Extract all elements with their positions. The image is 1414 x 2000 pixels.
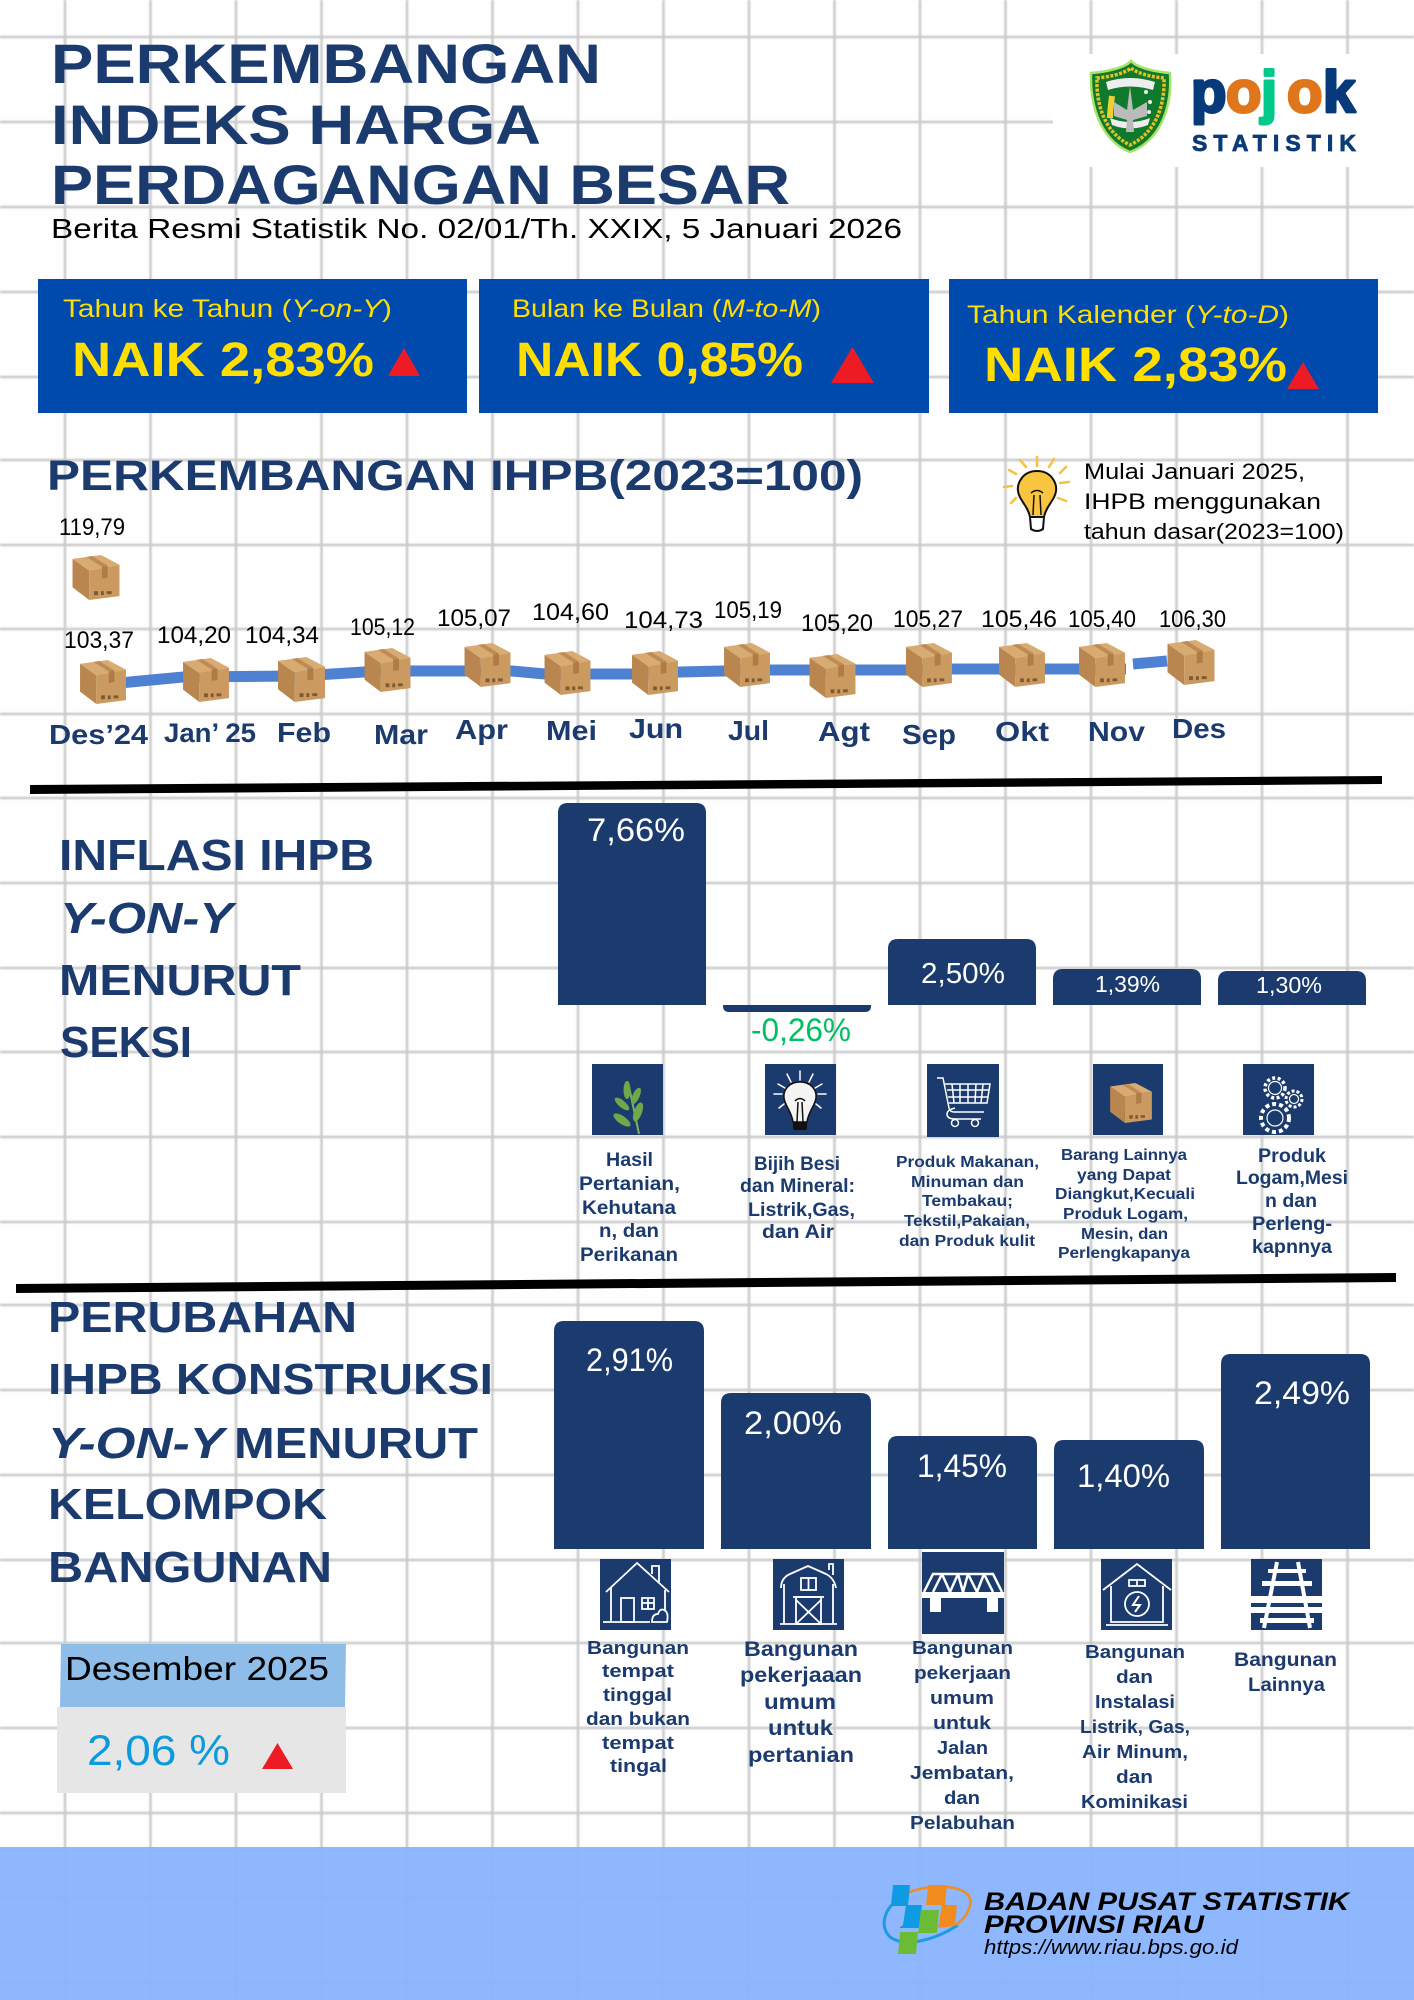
heading: konstruksi: BANGUNAN bbox=[48, 1543, 332, 1592]
label: Bijih Besi: dan Air bbox=[762, 1222, 835, 1243]
label: Produk Makanan: Minuman dan bbox=[911, 1174, 1024, 1191]
label: Barang Lainnya: Diangkut,Kecuali bbox=[1055, 1186, 1195, 1203]
icon: up triangle bbox=[388, 348, 420, 376]
point Des'24: 103,37 bbox=[64, 627, 134, 654]
point Jun bbox=[624, 607, 703, 744]
point Agt: 105,20 bbox=[801, 610, 873, 637]
label: jalan jembatan: Bangunan bbox=[912, 1638, 1013, 1658]
label: Barang Lainnya: Produk Logam, bbox=[1063, 1206, 1188, 1223]
label: Barang Lainnya: Mesin, dan bbox=[1081, 1226, 1168, 1243]
label: instalasi: Kominikasi bbox=[1081, 1792, 1188, 1812]
label: lainnya: Lainnya bbox=[1248, 1675, 1325, 1696]
label: Produk Logam: Perleng- bbox=[1252, 1214, 1332, 1235]
point Mei: Mei bbox=[546, 715, 597, 746]
label: Bijih Besi: Bijih Besi bbox=[754, 1154, 840, 1175]
label: instalasi: dan bbox=[1116, 1767, 1153, 1787]
heading: inflasi seksi: SEKSI bbox=[60, 1018, 192, 1067]
note: base year: IHPB menggunakan bbox=[1084, 489, 1321, 514]
bar Barang Lainnya bbox=[1053, 969, 1201, 1005]
bar Bijih Besi bbox=[723, 1005, 871, 1048]
bar Hasil Pertanian bbox=[558, 803, 706, 1005]
heading: inflasi seksi: Y-ON-Y bbox=[60, 894, 237, 943]
title: PERKEMBANGAN bbox=[51, 32, 601, 95]
label: tempat tinggal: Bangunan bbox=[587, 1638, 689, 1658]
footer bbox=[0, 1847, 1414, 2000]
point Jan 25 bbox=[157, 622, 256, 748]
point Feb: 104,34 bbox=[245, 622, 319, 649]
label: Produk Makanan bbox=[896, 1154, 1039, 1250]
label: jalan jembatan bbox=[910, 1638, 1015, 1833]
bar Hasil Pertanian: 7,66% bbox=[587, 812, 685, 848]
point Jan 25: Jan’ 25 bbox=[164, 718, 256, 748]
icon: power house bbox=[1101, 1559, 1172, 1630]
label: lainnya: Bangunan bbox=[1234, 1650, 1337, 1671]
label: Produk Logam: Logam,Mesi bbox=[1236, 1168, 1348, 1189]
label: Barang Lainnya: Barang Lainnya bbox=[1061, 1147, 1187, 1164]
bar instalasi bbox=[1054, 1440, 1204, 1549]
note: base year: tahun dasar(2023=100) bbox=[1084, 519, 1344, 544]
title: INDEKS HARGA bbox=[51, 93, 541, 156]
point Mei: 104,60 bbox=[532, 599, 609, 626]
icon: barn bbox=[773, 1559, 844, 1630]
point Okt bbox=[981, 606, 1057, 747]
label: Hasil Pertanian: Kehutana bbox=[582, 1198, 676, 1219]
label: jalan jembatan: umum bbox=[930, 1688, 994, 1708]
label: jalan jembatan: pekerjaan bbox=[914, 1663, 1011, 1683]
bar pertanian bbox=[721, 1393, 871, 1549]
point Mei bbox=[532, 599, 609, 746]
icon: house bbox=[600, 1559, 671, 1630]
heading: konstruksi: MENURUT bbox=[234, 1419, 478, 1468]
bar tempat tinggal: 2,91% bbox=[586, 1342, 673, 1378]
point Des bbox=[1159, 606, 1226, 744]
panel: M-to-M bbox=[479, 279, 929, 413]
icon: up triangle bbox=[1287, 362, 1319, 389]
point Nov bbox=[1068, 606, 1145, 747]
bar instalasi: 1,40% bbox=[1077, 1458, 1170, 1494]
icon: bridge bbox=[922, 1552, 1004, 1634]
label: Produk Makanan: Tekstil,Pakaian, bbox=[904, 1213, 1030, 1230]
label: Hasil Pertanian: Hasil bbox=[606, 1150, 653, 1171]
label: instalasi: Air Minum, bbox=[1082, 1742, 1188, 1762]
point Sep: Sep bbox=[902, 719, 956, 750]
panel: M-to-M: NAIK 0,85% bbox=[516, 334, 803, 387]
bar jalan jembatan: 1,45% bbox=[917, 1448, 1007, 1484]
label: Produk Makanan: dan Produk kulit bbox=[899, 1233, 1036, 1250]
label: tempat tinggal bbox=[586, 1638, 690, 1776]
note: base year bbox=[1084, 459, 1344, 544]
label: Produk Logam: n dan bbox=[1265, 1191, 1317, 1212]
trend line bbox=[120, 661, 1167, 683]
bar jalan jembatan bbox=[888, 1436, 1037, 1549]
point Des'24 bbox=[49, 627, 148, 750]
label: pekerjaan pertanian: Bangunan bbox=[744, 1638, 858, 1661]
line chart: IHPB bbox=[49, 514, 1226, 750]
bar tempat tinggal bbox=[554, 1321, 704, 1549]
icon: gears bbox=[1243, 1064, 1314, 1135]
bar chart: konstruksi bbox=[554, 1321, 1370, 1549]
label: Bijih Besi: Listrik,Gas, bbox=[748, 1200, 855, 1221]
icon: bulb bbox=[765, 1064, 836, 1135]
note: base year: Mulai Januari 2025, bbox=[1084, 459, 1305, 484]
point Okt: 105,46 bbox=[981, 606, 1057, 633]
label: Produk Makanan: Tembakau; bbox=[922, 1193, 1013, 1210]
label: jalan jembatan: dan bbox=[944, 1788, 980, 1808]
label: pekerjaan pertanian: untuk bbox=[768, 1717, 833, 1740]
heading: IHPB trend: PERKEMBANGAN IHPB(2023=100) bbox=[47, 452, 863, 500]
point Jun: 104,73 bbox=[624, 607, 703, 634]
label: instalasi: Instalasi bbox=[1095, 1692, 1175, 1712]
panel: Y-to-D: NAIK 2,83% bbox=[984, 339, 1287, 392]
point Jun: Jun bbox=[629, 713, 683, 744]
label: Bijih Besi bbox=[740, 1154, 855, 1243]
panel: Desember 2025 bbox=[57, 1644, 346, 1793]
icon: rail track bbox=[1251, 1559, 1322, 1630]
panel: M-to-M: Bulan ke Bulan ( M-to-M ) bbox=[512, 295, 821, 323]
heading: konstruksi: KELOMPOK bbox=[48, 1480, 327, 1529]
panel: Y-to-D bbox=[949, 279, 1378, 413]
panel: Y-to-D: Tahun Kalender ( Y-to-D ) bbox=[967, 301, 1289, 329]
heading: konstruksi: PERUBAHAN bbox=[48, 1293, 357, 1342]
point Mar: 105,12 bbox=[350, 614, 415, 641]
bar lainnya: 2,49% bbox=[1254, 1375, 1350, 1411]
icon: provincial emblem bbox=[1091, 61, 1170, 152]
heading: inflasi seksi: INFLASI IHPB bbox=[59, 831, 374, 880]
label: Produk Logam: kapnnya bbox=[1252, 1237, 1332, 1258]
icon: package bbox=[1093, 1064, 1163, 1135]
point Mar bbox=[350, 614, 428, 750]
logo panel bbox=[1053, 54, 1414, 167]
heading: inflasi seksi bbox=[59, 831, 374, 1067]
point Des: Des bbox=[1172, 713, 1226, 744]
label: Hasil Pertanian bbox=[579, 1150, 680, 1266]
label: Barang Lainnya bbox=[1055, 1147, 1195, 1262]
label: pekerjaan pertanian bbox=[740, 1638, 862, 1767]
icon: light bulb bbox=[1004, 457, 1069, 531]
icon: up triangle bbox=[831, 347, 874, 383]
label: Barang Lainnya: Perlengkapanya bbox=[1058, 1245, 1190, 1262]
point Des: 106,30 bbox=[1159, 606, 1226, 633]
label: jalan jembatan: Jalan bbox=[937, 1738, 988, 1758]
point Jul: Jul bbox=[728, 715, 769, 746]
panel: Y-on-Y bbox=[38, 279, 467, 413]
label: Hasil Pertanian: Pertanian, bbox=[579, 1174, 680, 1195]
label: instalasi: dan bbox=[1116, 1667, 1153, 1687]
label: lainnya bbox=[1234, 1650, 1337, 1696]
label: Produk Logam: Produk bbox=[1258, 1146, 1326, 1167]
label: instalasi: Bangunan bbox=[1085, 1642, 1185, 1662]
title: PERDAGANGAN BESAR bbox=[51, 153, 790, 216]
point Apr bbox=[437, 605, 511, 745]
bar lainnya bbox=[1221, 1354, 1370, 1549]
label: pekerjaan pertanian: pertanian bbox=[748, 1744, 854, 1767]
title bbox=[51, 32, 790, 216]
label: Hasil Pertanian: Perikanan bbox=[580, 1245, 678, 1266]
point Mar: Mar bbox=[374, 719, 428, 750]
point Jul bbox=[714, 597, 782, 746]
point Jan 25: 104,20 bbox=[157, 622, 231, 649]
label: jalan jembatan: untuk bbox=[933, 1713, 992, 1733]
agency name: BADAN PUSAT STATISTIK bbox=[984, 1888, 1351, 1916]
icon: up triangle bbox=[262, 1743, 293, 1769]
statistik wordmark: STATISTIK bbox=[1192, 130, 1356, 156]
reference box 119,79 bbox=[59, 514, 125, 600]
label: jalan jembatan: Pelabuhan bbox=[910, 1813, 1015, 1833]
label: pekerjaan pertanian: pekerjaaan bbox=[740, 1664, 862, 1687]
panel: Y-on-Y: NAIK 2,83% bbox=[72, 334, 374, 387]
bar Produk Makanan bbox=[888, 939, 1036, 1005]
label: instalasi bbox=[1080, 1642, 1190, 1812]
label: tempat tinggal: tempat bbox=[602, 1661, 674, 1681]
bar Produk Logam: 1,30% bbox=[1256, 972, 1322, 998]
label: Hasil Pertanian: n, dan bbox=[599, 1221, 659, 1242]
point Agt bbox=[801, 610, 873, 747]
panel: Desember 2025: Desember 2025 bbox=[65, 1650, 329, 1687]
point Nov: Nov bbox=[1088, 716, 1145, 747]
heading: konstruksi: IHPB KONSTRUKSI bbox=[48, 1355, 493, 1404]
heading: konstruksi: Y-ON-Y bbox=[48, 1419, 228, 1468]
point Feb: Feb bbox=[277, 717, 331, 748]
label: Barang Lainnya: yang Dapat bbox=[1077, 1167, 1172, 1184]
point Nov: 105,40 bbox=[1068, 606, 1136, 633]
label: tempat tinggal: tempat bbox=[602, 1733, 674, 1753]
label: tempat tinggal: dan bukan bbox=[586, 1709, 690, 1729]
label: Produk Makanan: Produk Makanan, bbox=[896, 1154, 1039, 1171]
bar Barang Lainnya: 1,39% bbox=[1095, 971, 1160, 997]
point Agt: Agt bbox=[818, 716, 870, 747]
bar chart: seksi bbox=[558, 803, 1366, 1048]
footer: PROVINSI RIAU bbox=[984, 1911, 1205, 1939]
bar Bijih Besi: -0,26% bbox=[751, 1012, 851, 1048]
point Apr: Apr bbox=[455, 714, 508, 745]
point Okt: Okt bbox=[995, 716, 1049, 747]
panel: Y-on-Y: Tahun ke Tahun ( Y-on-Y ) bbox=[63, 295, 392, 323]
heading: konstruksi bbox=[48, 1293, 493, 1592]
bar pertanian: 2,00% bbox=[744, 1405, 842, 1441]
point Sep bbox=[893, 606, 963, 750]
label: Bijih Besi: dan Mineral: bbox=[740, 1176, 855, 1197]
point Sep: 105,27 bbox=[893, 606, 963, 633]
label: pekerjaan pertanian: umum bbox=[764, 1691, 836, 1714]
point Des'24: Des’24 bbox=[49, 719, 148, 750]
panel: Desember 2025: 2,06 % bbox=[87, 1727, 230, 1775]
website: https://www.riau.bps.go.id bbox=[984, 1937, 1239, 1959]
heading: inflasi seksi: MENURUT bbox=[59, 956, 301, 1005]
bar Produk Logam bbox=[1218, 971, 1366, 1005]
reference box 119,79: 119,79 bbox=[59, 514, 125, 541]
pojok wordmark: pojok bbox=[1191, 60, 1356, 125]
point Jul: 105,19 bbox=[714, 597, 782, 624]
icon: plant bbox=[592, 1064, 663, 1135]
icon: shopping cart bbox=[927, 1064, 999, 1137]
point Feb bbox=[245, 622, 331, 748]
icon: BPS logo bbox=[884, 1885, 970, 1954]
label: jalan jembatan: Jembatan, bbox=[910, 1763, 1014, 1783]
label: instalasi: Listrik, Gas, bbox=[1080, 1717, 1190, 1737]
subtitle: Berita Resmi Statistik No. 02/01/Th. XXIX, 5 Januari 2026 bbox=[51, 213, 902, 244]
bar Produk Makanan: 2,50% bbox=[921, 958, 1005, 990]
label: tempat tinggal: tinggal bbox=[603, 1685, 672, 1705]
label: tempat tinggal: tingal bbox=[610, 1756, 667, 1776]
point Apr: 105,07 bbox=[437, 605, 511, 632]
label: Produk Logam bbox=[1236, 1146, 1348, 1258]
